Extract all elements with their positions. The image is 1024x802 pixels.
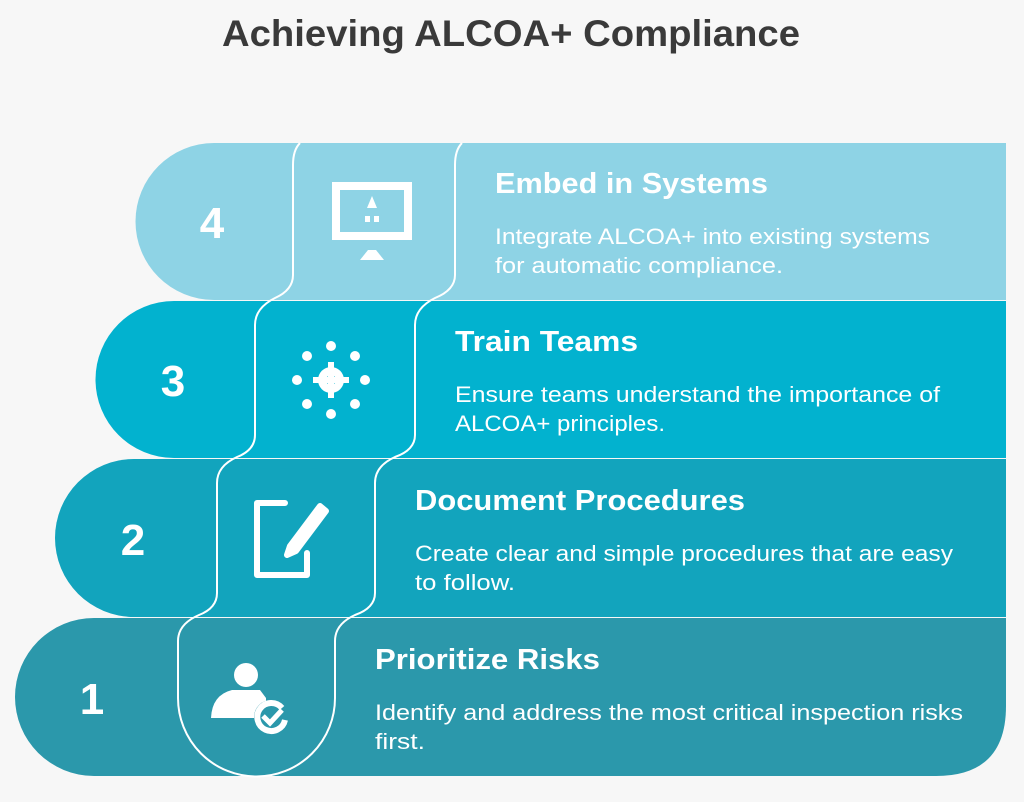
icon: gear network xyxy=(292,341,370,419)
band 1 xyxy=(15,618,1006,776)
icon: monitor xyxy=(332,182,412,260)
text: step 1: Identify and address the most critical inspection risks xyxy=(375,700,963,725)
text: step 2: Document Procedures xyxy=(415,485,745,517)
text: step 4: for automatic compliance. xyxy=(495,253,783,278)
text: step 4: Integrate ALCOA+ into existing systems xyxy=(495,224,930,249)
band 3 xyxy=(96,301,1006,458)
text: step 2: to follow. xyxy=(415,570,515,595)
text: step 1: Prioritize Risks xyxy=(375,644,600,676)
band 4 xyxy=(136,143,1006,300)
text: step 1 xyxy=(375,644,963,754)
number 4: 4 xyxy=(200,199,225,248)
text: step 2: Create clear and simple procedures that are easy xyxy=(415,541,953,566)
text: step 3: Train Teams xyxy=(455,326,638,358)
number 2: 2 xyxy=(121,516,145,565)
number 1: 1 xyxy=(80,675,104,724)
text: step 3: ALCOA+ principles. xyxy=(455,411,665,436)
text: step 3: Ensure teams understand the importance of xyxy=(455,382,941,407)
text: step 1: first. xyxy=(375,729,425,754)
icon: document pen xyxy=(257,503,326,575)
band 2 xyxy=(55,459,1006,617)
number 3: 3 xyxy=(161,357,185,406)
title: Achieving ALCOA+ Compliance xyxy=(222,13,800,54)
icon column outline xyxy=(178,143,462,776)
text: step 4: Embed in Systems xyxy=(495,168,768,200)
text: step 4 xyxy=(495,168,930,278)
text: step 3 xyxy=(455,326,941,436)
icon: person check xyxy=(211,663,288,734)
text: step 2 xyxy=(415,485,953,595)
